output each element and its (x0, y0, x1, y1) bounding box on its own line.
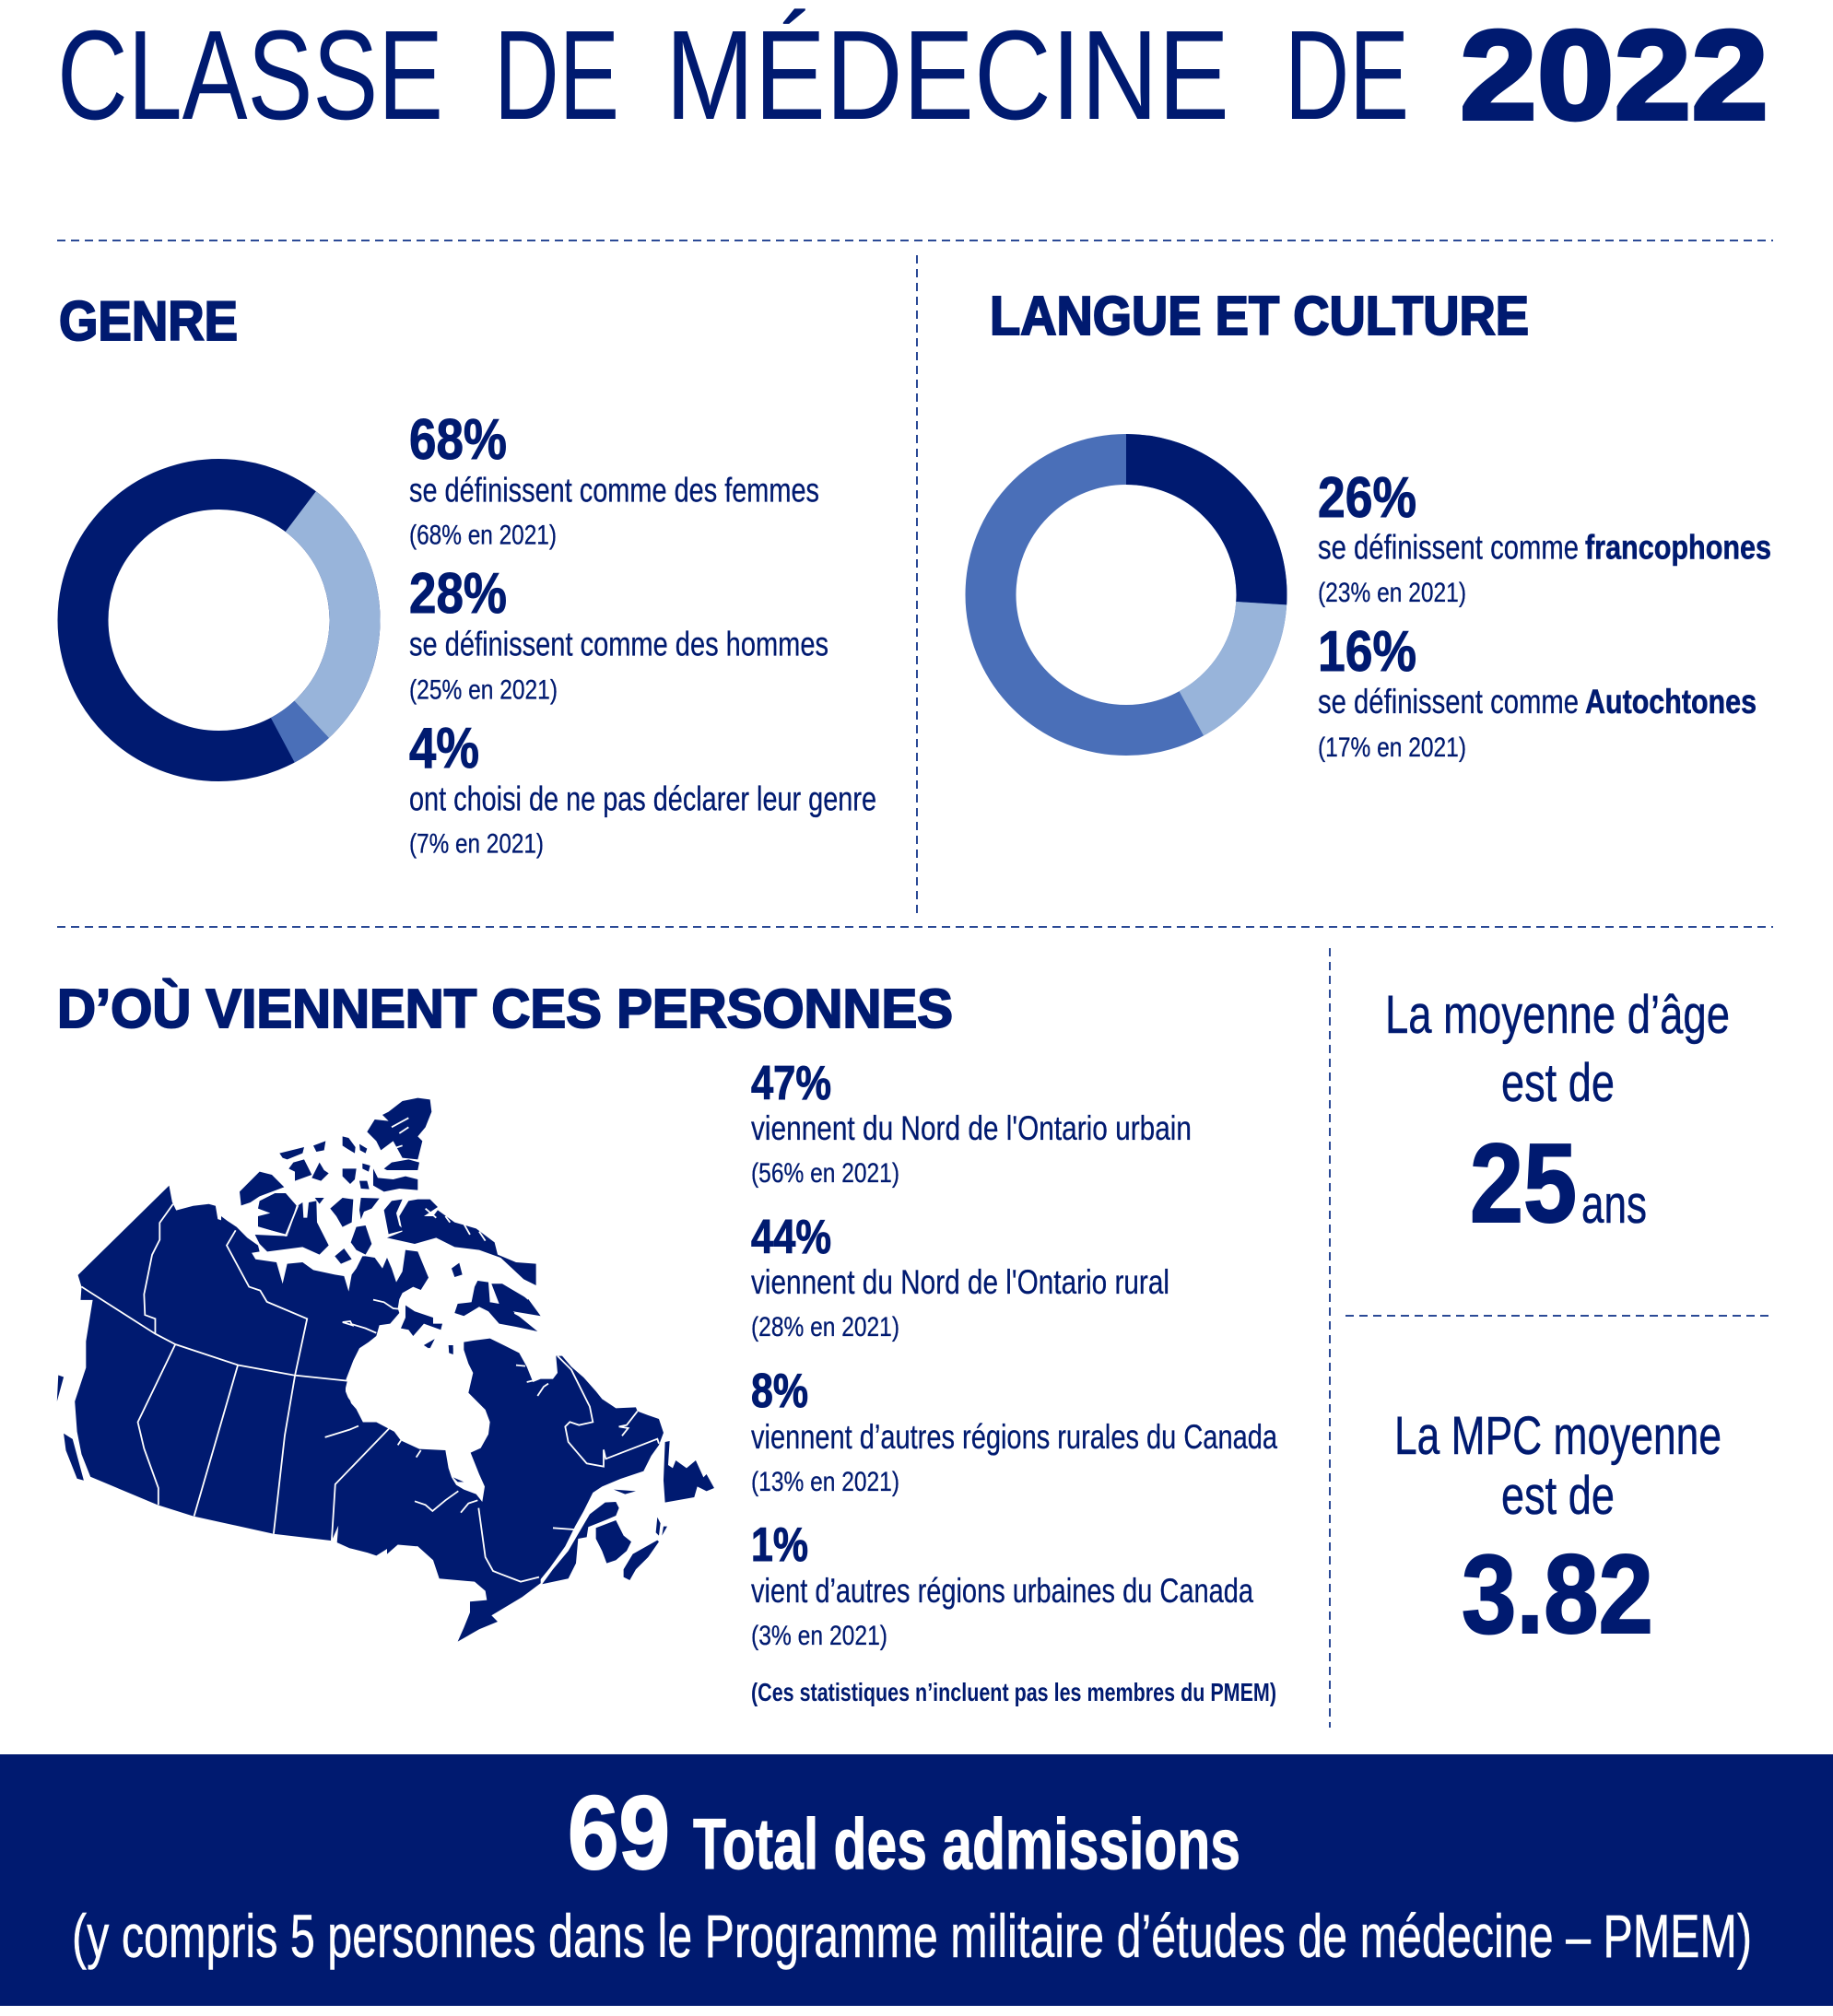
title: 2022 (1460, 5, 1768, 147)
stat: 8% other rural Canada: viennent d’autres régions rurales du Canada (751, 1418, 1277, 1456)
stat: 1% other urban Canada: 1% (751, 1518, 808, 1572)
panel: average age: est de (1501, 1053, 1615, 1113)
stat: 47% urban northern Ontario: 47% (751, 1057, 831, 1110)
stat: 16% Autochtones: 16% (1318, 620, 1416, 684)
panel: average GPA (1394, 1406, 1721, 1657)
stat: 4% undeclared (409, 717, 876, 859)
stat: 8% other rural Canada: (13% en 2021) (751, 1467, 899, 1497)
panel: average age (1385, 985, 1730, 1246)
stat: 28% men: 28% (409, 562, 507, 626)
panel: langue et culture (982, 286, 1771, 763)
stat: 1% other urban Canada: (3% en 2021) (751, 1621, 887, 1651)
footnote: (Ces statistiques n’incluent pas les membres du PMEM) (751, 1678, 1276, 1706)
stat: 8% other rural Canada: 8% (751, 1365, 808, 1418)
stat: 47% urban northern Ontario (751, 1057, 1192, 1189)
title: MÉDECINE (665, 5, 1229, 147)
heading: langue et culture: LANGUE ET CULTURE (990, 286, 1529, 346)
stat: 26% francophones: 26% (1318, 466, 1416, 530)
stat: 26% francophones: (23% en 2021) (1318, 578, 1466, 608)
title: CLASSE (57, 5, 443, 147)
panel: average GPA: est de (1501, 1466, 1615, 1526)
stat: 44% rural northern Ontario: viennent du Nord de l'Ontario rural (751, 1263, 1169, 1301)
stat: 26% francophones: francophones (1585, 529, 1771, 566)
stat: 44% rural northern Ontario: (28% en 2021) (751, 1312, 899, 1342)
banner: total admissions: 69 (568, 1775, 670, 1891)
stat: 26% francophones: se définissent comme (1318, 529, 1579, 566)
panel: average age: ans (1581, 1175, 1647, 1235)
map: Canada (57, 1098, 714, 1642)
panel: origine (57, 979, 1277, 1706)
stat: 44% rural northern Ontario: 44% (751, 1211, 831, 1264)
panel: average age: 25 (1470, 1120, 1577, 1246)
stat: 26% francophones (1318, 466, 1771, 608)
stat: 16% Autochtones: Autochtones (1585, 683, 1757, 721)
stat: 1% other urban Canada (751, 1518, 1253, 1651)
stat: 16% Autochtones: (17% en 2021) (1318, 733, 1466, 763)
stat: 4% undeclared: (7% en 2021) (409, 829, 544, 859)
title: DE (1285, 5, 1409, 147)
stat: 28% men: (25% en 2021) (409, 674, 558, 706)
panel: average age: La moyenne d’âge (1385, 985, 1730, 1045)
stat: 47% urban northern Ontario: (56% en 2021) (751, 1158, 899, 1189)
donut chart: langue (982, 451, 1270, 738)
heading: d'où viennent ces personnes: D’OÙ VIENNENT CES PERSONNES (57, 979, 953, 1039)
stat: 1% other urban Canada: vient d’autres régions urbaines du Canada (751, 1572, 1253, 1610)
title (57, 5, 1768, 147)
stat: 16% Autochtones (1318, 620, 1757, 763)
stat: 68% women: 68% (409, 408, 507, 472)
donut chart: genre (27, 428, 411, 812)
stat: 8% other rural Canada (751, 1365, 1277, 1497)
stat: 4% undeclared: ont choisi de ne pas déclarer leur genre (409, 779, 876, 818)
title: DE (494, 5, 619, 147)
stat: 47% urban northern Ontario: viennent du Nord de l'Ontario urbain (751, 1109, 1192, 1147)
stat: 28% men: se définissent comme des hommes (409, 625, 828, 663)
panel: genre (27, 290, 876, 859)
stat: 68% women: (68% en 2021) (409, 520, 557, 551)
stat: 16% Autochtones: se définissent comme (1318, 683, 1579, 721)
stat: 68% women: se définissent comme des femmes (409, 472, 819, 509)
panel: average GPA: 3.82 (1462, 1531, 1653, 1657)
banner: total admissions (0, 1754, 1833, 2006)
stat: 4% undeclared: 4% (409, 717, 479, 780)
stat: 44% rural northern Ontario (751, 1211, 1169, 1342)
banner: total admissions: Total des admissions (693, 1803, 1240, 1884)
stat: 28% men (409, 562, 828, 706)
panel: average GPA: La MPC moyenne (1394, 1406, 1721, 1466)
stat: 68% women (409, 408, 819, 551)
heading: genre: GENRE (59, 290, 238, 352)
